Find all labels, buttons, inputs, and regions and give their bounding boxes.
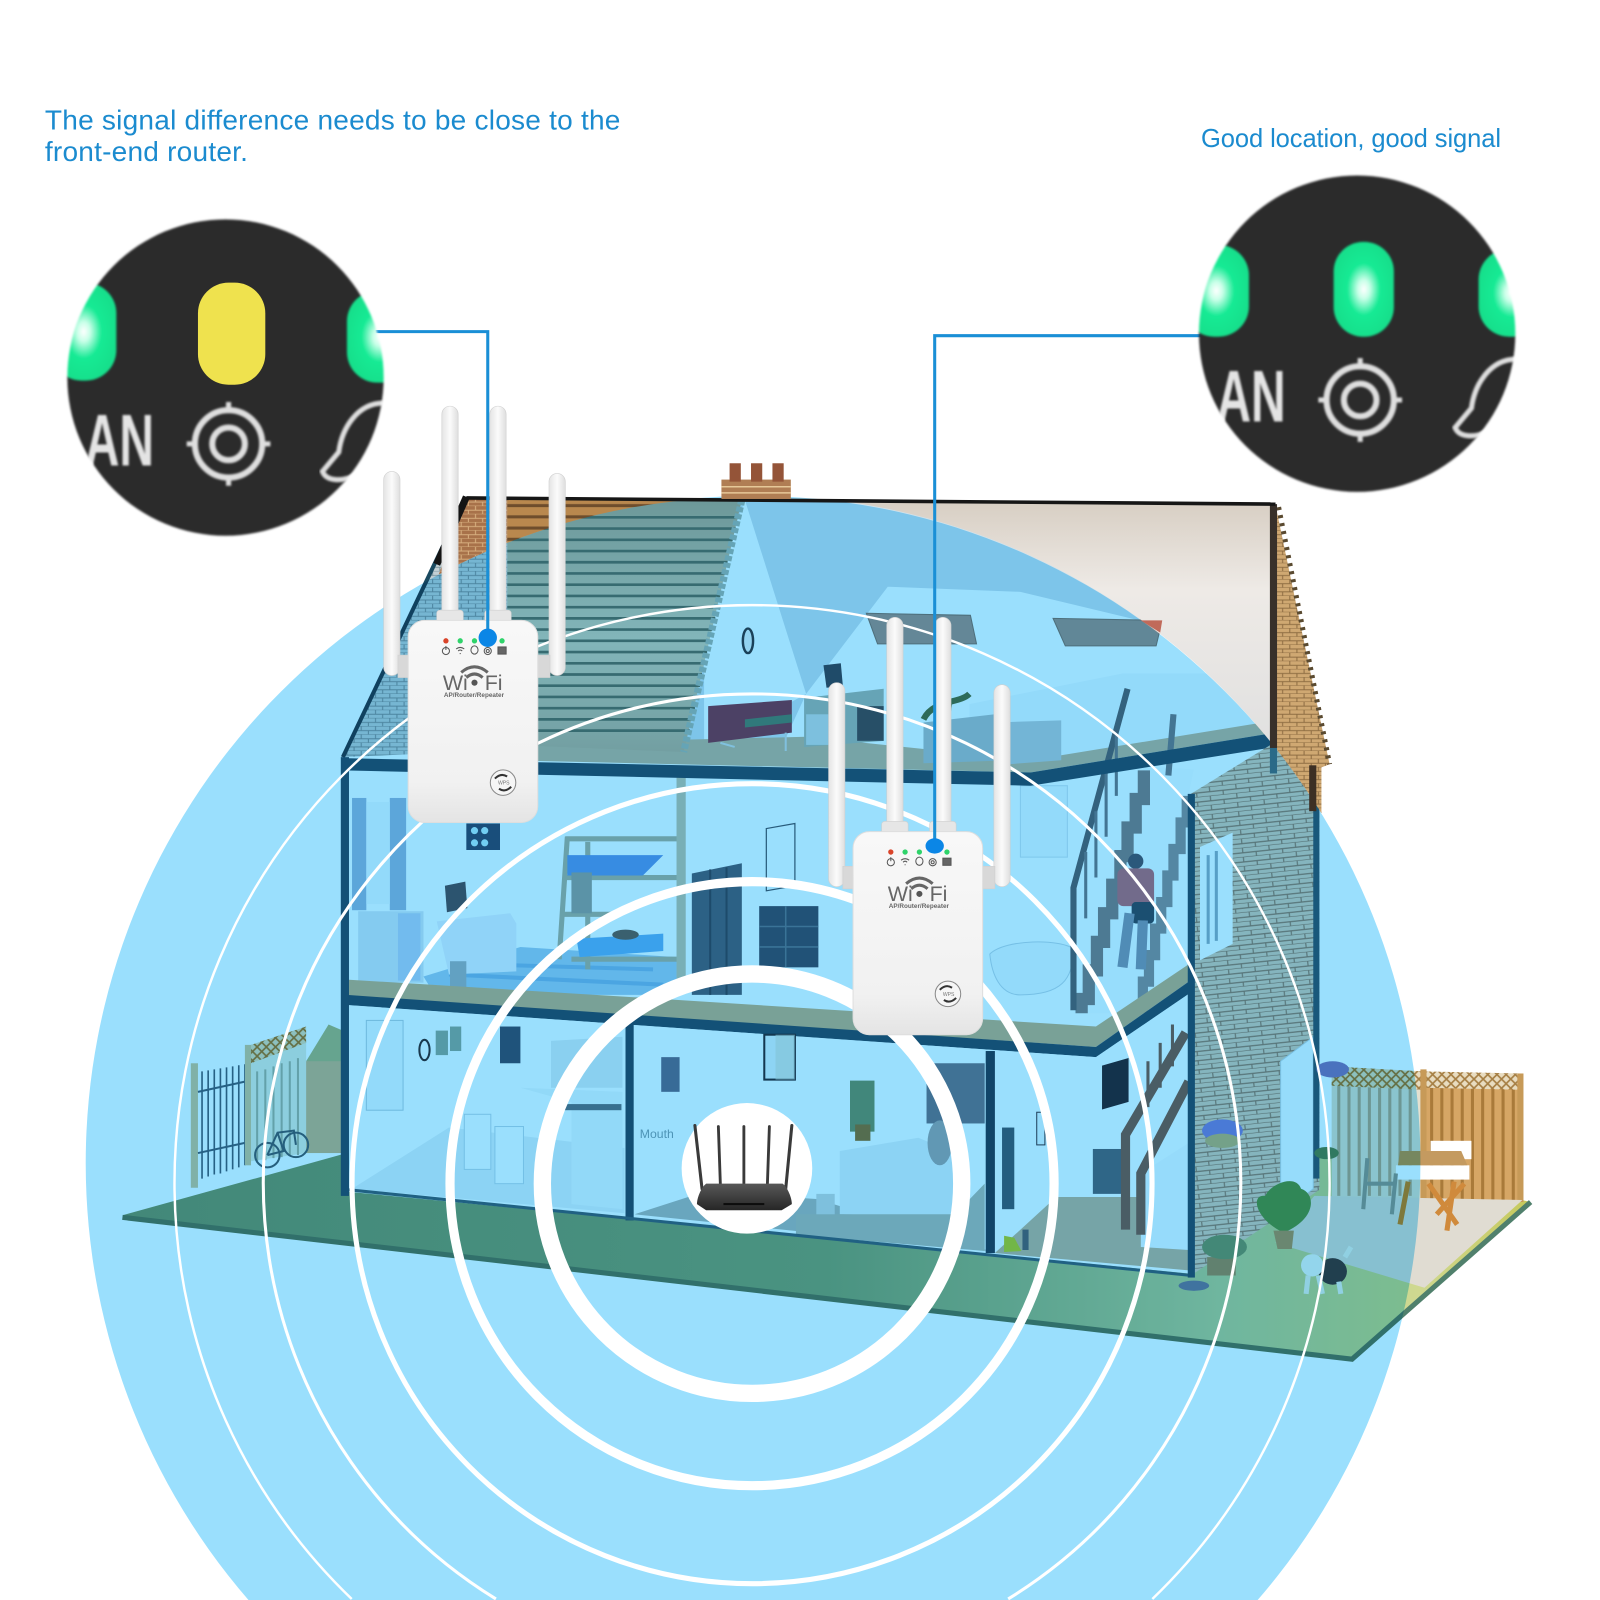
attic wall outside disc (843, 501, 1276, 748)
wifi arcs (906, 878, 933, 889)
left callout line (376, 332, 488, 638)
chimney (721, 463, 791, 499)
left wall post (341, 757, 349, 1196)
skylight one (866, 613, 977, 644)
magnifier: good signal green LED (1197, 174, 1517, 494)
attic roof beam (969, 673, 1270, 770)
signal rings (174, 605, 1330, 1599)
ring 3 (352, 784, 1152, 1584)
wifi dot (916, 891, 922, 897)
left callout dot (479, 629, 497, 647)
faint Mouth label: Mouth (640, 1127, 674, 1141)
ring 4 (263, 694, 1241, 1599)
ring 5 (174, 605, 1330, 1599)
patio (1276, 1196, 1522, 1288)
attic furniture (540, 646, 1061, 765)
model label: AP/Router/Repeater (889, 903, 949, 910)
right green LED (345, 294, 386, 384)
AN label: AN (1216, 354, 1286, 437)
attic floor (507, 720, 1276, 772)
second floor room (347, 761, 1189, 1041)
router antennas (695, 1126, 792, 1189)
fi label: Fi (485, 671, 503, 695)
status icons (442, 646, 506, 655)
ground floor rooms (349, 994, 1189, 1273)
ring 1 (542, 974, 962, 1393)
wi label: Wi (888, 882, 913, 906)
left repeater (384, 406, 565, 822)
house illustration (122, 497, 1531, 1359)
drain cover (1179, 1281, 1209, 1291)
heading: left note second line: front-end router. (45, 136, 248, 167)
status LEDs (443, 638, 505, 643)
heading: left note: The signal difference needs to be close to the (45, 105, 620, 136)
roof dark upper slope (437, 497, 466, 564)
drain pipe (1313, 770, 1319, 1179)
globe icon (322, 403, 388, 480)
attic light planes (704, 500, 1276, 781)
stairs (1073, 689, 1194, 1013)
antennas (829, 617, 1010, 889)
wifi dot (471, 680, 478, 686)
model label: AP/Router/Repeater (444, 692, 504, 699)
center green LED (1334, 242, 1394, 337)
house parts outside the signal disc (437, 463, 1330, 813)
brick side wall (1191, 742, 1319, 1276)
WPS button (935, 981, 961, 1007)
garden plants (1202, 1147, 1339, 1276)
roof slope with shingle lines (343, 497, 742, 757)
right callout line (935, 336, 1201, 846)
gable sawtooth edge (1279, 507, 1330, 764)
status icons (887, 857, 951, 866)
fi label: Fi (930, 882, 947, 906)
lawn front edge (122, 1202, 1531, 1359)
attic right edge (1270, 504, 1277, 748)
ground floor furnishings (352, 1020, 1189, 1270)
router slot (723, 1203, 764, 1205)
house base line (349, 1190, 1192, 1276)
status LEDs (888, 849, 950, 855)
lawn (122, 1153, 1531, 1358)
device body (408, 620, 538, 822)
heading: right note: Good location, good signal (1201, 125, 1501, 153)
brown roof brick outside disc (439, 497, 507, 574)
roof left edge (343, 497, 466, 757)
left green LED (1198, 244, 1251, 338)
attic window spot (743, 629, 753, 653)
yellow LED (198, 283, 265, 385)
hanging baskets (1202, 1061, 1349, 1148)
antennas (384, 406, 565, 678)
side wall window (1200, 833, 1233, 960)
corner post (1188, 794, 1195, 1278)
right repeater (829, 617, 1010, 1035)
WPS button: WPS (498, 781, 510, 787)
slab between floors (347, 964, 1189, 1057)
ring 2 (450, 882, 1054, 1486)
person on stairs (1117, 854, 1154, 969)
globe icon (1455, 359, 1520, 436)
left green LED (66, 284, 118, 382)
left fence and shed (191, 1024, 343, 1188)
signal coverage disc (86, 496, 1420, 1600)
AN label: AN (85, 398, 154, 481)
second floor furnishings (352, 776, 1073, 995)
skylight two (1053, 618, 1162, 646)
target icon (187, 402, 270, 486)
gable brick wall (1276, 505, 1330, 813)
WPS button: WPS (943, 992, 955, 998)
device body (853, 832, 983, 1035)
skylight corner outside disc (1141, 620, 1162, 633)
router body (697, 1184, 792, 1210)
wi label: Wi (443, 671, 468, 695)
magnifier: weak signal yellow LED (66, 218, 386, 538)
roof ridge (466, 498, 1276, 504)
magnifier background (61, 214, 388, 541)
brown roof shingles outside disc (507, 498, 714, 543)
dark downpipe (1309, 765, 1316, 811)
magnifier background (1194, 171, 1520, 498)
top slab (343, 733, 1276, 786)
attic back wall (682, 500, 1276, 781)
wifi arcs (461, 667, 488, 678)
side door (1281, 1037, 1313, 1214)
right callout dot (926, 838, 944, 854)
front-end router badge (682, 1103, 812, 1234)
right green LED (1477, 252, 1517, 338)
patio table and chairs (1363, 1141, 1471, 1231)
right fence (1332, 1066, 1523, 1202)
WPS button (490, 770, 516, 795)
attic right edge inside disc (1270, 748, 1277, 773)
target icon (1318, 358, 1402, 442)
dog (1301, 1247, 1351, 1294)
